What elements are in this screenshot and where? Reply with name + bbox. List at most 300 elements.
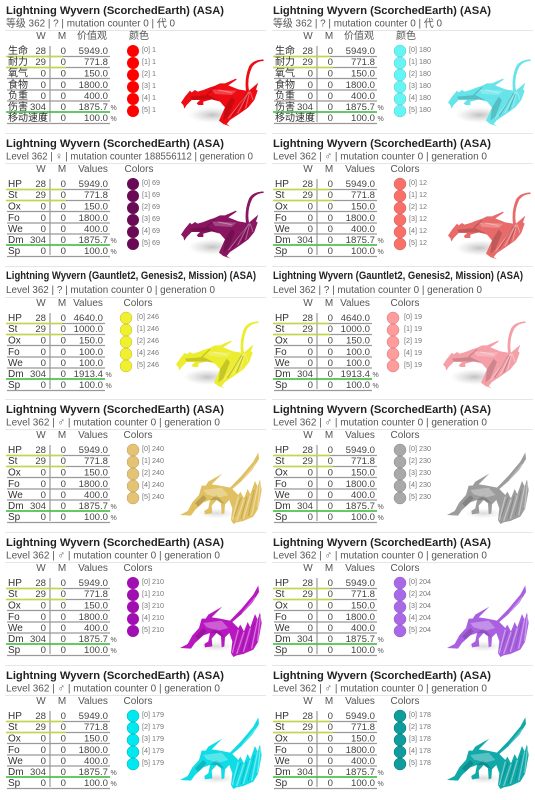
colours list xyxy=(124,696,164,770)
stats table: 29 xyxy=(35,589,46,600)
stats table: 氧气 xyxy=(275,66,295,80)
subtitle: Level 362 | ♂ | mutation counter 0 | generation 0 xyxy=(6,416,220,428)
stats table: 0 xyxy=(328,68,333,80)
stats table: Dm xyxy=(8,369,24,380)
stats table: 0 xyxy=(328,80,333,91)
stats table: 0 xyxy=(328,324,333,335)
stats table: 伤害 xyxy=(275,100,295,113)
subtitle: Level 362 | ♀ | mutation counter 188556112 | generation 0 xyxy=(6,150,253,162)
stats table: 28 xyxy=(302,711,313,722)
stats table: 304 xyxy=(30,767,47,778)
stats table: 150.0 xyxy=(346,336,370,346)
stats table: 0 xyxy=(328,623,333,634)
colours list: [0] 204 xyxy=(409,577,431,586)
stats table: 0 xyxy=(61,313,66,324)
stats table: 304 xyxy=(30,102,47,113)
stats table: 400.0 xyxy=(351,756,375,767)
colours list: [3] 1 xyxy=(142,81,156,90)
colours list: Colors xyxy=(124,298,152,309)
stats table: % xyxy=(110,116,117,123)
stats table: 0 xyxy=(61,578,66,589)
stats table: 0 xyxy=(328,113,333,124)
colours list: [4] 204 xyxy=(409,613,431,622)
stats table: Dm xyxy=(275,235,291,246)
stats table: 100.0 xyxy=(346,380,370,391)
stats table: 304 xyxy=(30,501,47,512)
stats table: 771.8 xyxy=(351,190,375,201)
stats table: 0 xyxy=(308,468,313,478)
colours list: [0] 210 xyxy=(142,577,164,586)
stats table: 400.0 xyxy=(351,490,375,501)
stats table: 0 xyxy=(328,445,333,456)
stats table: 304 xyxy=(297,767,314,778)
stats table: 0 xyxy=(308,479,313,490)
stats table: 0 xyxy=(308,224,313,235)
stats table: We xyxy=(275,623,290,634)
stats table: 28 xyxy=(302,578,313,589)
wyvern image xyxy=(447,717,529,789)
stats table: 0 xyxy=(61,380,66,391)
stats table: 1875.7 xyxy=(79,634,108,645)
stats table: 0 xyxy=(41,224,46,235)
stats table: 0 xyxy=(41,468,46,478)
stats table: 100.0 xyxy=(351,645,375,656)
stats table: 150.0 xyxy=(351,202,375,212)
stats table: 100.0 xyxy=(79,358,103,369)
title: Lightning Wyvern (Gauntlet2, Genesis2, Mission) (ASA) xyxy=(6,270,256,282)
stats table: 0 xyxy=(308,347,313,358)
colours list: [0] 12 xyxy=(409,178,427,187)
stats table: Sp xyxy=(8,246,21,257)
stats table: 28 xyxy=(35,313,46,324)
colours list: [2] 178 xyxy=(409,722,431,731)
colours list: [5] 246 xyxy=(137,360,159,369)
stats table: 0 xyxy=(328,224,333,235)
wyvern image xyxy=(447,452,529,524)
stats table: 5949.0 xyxy=(346,711,375,722)
stats table: 29 xyxy=(302,589,313,600)
stats table: 0 xyxy=(61,235,66,246)
stats table: % xyxy=(378,105,384,112)
stats table: 0 xyxy=(308,756,313,767)
stats table: HP xyxy=(275,179,289,190)
stats table: St xyxy=(275,589,285,600)
stats table: 0 xyxy=(61,778,66,789)
stats table: St xyxy=(275,324,285,335)
title: Lightning Wyvern (ScorchedEarth) (ASA) xyxy=(273,138,491,150)
stats table xyxy=(6,298,112,391)
stats table: 100.0 xyxy=(84,113,108,124)
colours list: [4] 1 xyxy=(142,93,156,102)
stats table: 304 xyxy=(297,102,314,113)
stats table: 生命 xyxy=(8,44,28,57)
stats table: % xyxy=(378,238,384,245)
stats table: 0 xyxy=(308,91,313,102)
stats table: 150.0 xyxy=(84,202,108,212)
stats table: 0 xyxy=(328,380,333,391)
stats table: HP xyxy=(8,179,22,190)
stats table: 0 xyxy=(328,501,333,512)
stats table: 5949.0 xyxy=(346,46,375,57)
stats table: W xyxy=(303,563,313,574)
stats table: 0 xyxy=(41,623,46,634)
stats table: 771.8 xyxy=(351,589,375,600)
stats table: 0 xyxy=(61,57,66,68)
wyvern image xyxy=(448,192,531,259)
stats table: 1875.7 xyxy=(79,102,108,113)
stats table: W xyxy=(36,563,46,574)
stats table: 0 xyxy=(328,179,333,190)
stats table: 771.8 xyxy=(351,57,375,68)
stats table: 5949.0 xyxy=(346,578,375,589)
stats table xyxy=(6,29,117,124)
stats table: St xyxy=(275,190,285,201)
stats table xyxy=(6,164,117,257)
colours list: [5] 204 xyxy=(409,625,431,634)
stats table: Sp xyxy=(8,645,21,656)
stats table: We xyxy=(8,224,23,235)
stats table: 0 xyxy=(41,347,46,358)
stats table: HP xyxy=(275,313,289,324)
stats table: 150.0 xyxy=(84,68,108,80)
stats table: 0 xyxy=(61,246,66,257)
stats table: 0 xyxy=(328,358,333,369)
colours list: [5] 69 xyxy=(142,238,160,247)
stats table: 0 xyxy=(308,612,313,623)
stats table xyxy=(273,696,384,789)
colours list: Colors xyxy=(391,563,419,574)
stats table: 0 xyxy=(61,113,66,124)
stats table: 0 xyxy=(328,190,333,201)
stats table: 0 xyxy=(41,213,46,224)
subtitle: Level 362 | ? | mutation counter 0 | generation 0 xyxy=(6,284,215,296)
colours list: [1] 12 xyxy=(409,190,427,199)
stats table: 29 xyxy=(302,722,313,733)
stats table: 0 xyxy=(61,102,66,113)
colours list: [2] 204 xyxy=(409,589,431,598)
stats table: 0 xyxy=(61,179,66,190)
stats table: 0 xyxy=(328,202,333,212)
stats table: We xyxy=(8,490,23,501)
stats table: Values xyxy=(340,298,370,309)
stats table: 100.0 xyxy=(346,358,370,369)
stats table: 100.0 xyxy=(351,246,375,257)
stats table: 0 xyxy=(41,246,46,257)
stats table: Sp xyxy=(275,645,288,656)
colours list xyxy=(391,164,427,250)
stats table: 0 xyxy=(328,745,333,756)
colours list: [2] 69 xyxy=(142,202,160,211)
colours list xyxy=(127,29,156,117)
stats table: 5949.0 xyxy=(346,445,375,456)
stats table: 0 xyxy=(308,600,313,612)
colours list: [4] 69 xyxy=(142,226,160,235)
stats table: 5949.0 xyxy=(79,445,108,456)
wyvern image xyxy=(180,585,262,657)
stats table: 0 xyxy=(61,445,66,456)
wyvern image xyxy=(180,717,262,789)
stats table: 400.0 xyxy=(84,756,108,767)
stats table: HP xyxy=(275,711,289,722)
colours list: [3] 210 xyxy=(142,601,164,610)
stats table: 耐力 xyxy=(275,55,295,68)
stats table: % xyxy=(110,648,117,655)
stats table: HP xyxy=(8,313,22,324)
stats table: 5949.0 xyxy=(79,711,108,722)
colours list: [3] 204 xyxy=(409,601,431,610)
stats table: 4640.0 xyxy=(341,313,370,324)
card: cyan wyvern (colour 180) xyxy=(272,5,533,126)
stats table: W xyxy=(36,31,46,42)
subtitle: 等级 362 | ? | mutation counter 0 | 代 0 xyxy=(273,16,442,30)
stats table xyxy=(273,298,379,391)
stats table: We xyxy=(275,756,290,767)
stats table: 5949.0 xyxy=(346,179,375,190)
colours list: [4] 178 xyxy=(409,746,431,755)
colours list: [3] 179 xyxy=(142,734,164,743)
stats table: 氧气 xyxy=(8,66,28,80)
stats table: 304 xyxy=(297,501,314,512)
subtitle: Level 362 | ♂ | mutation counter 0 | generation 0 xyxy=(6,682,220,694)
stats table: HP xyxy=(8,711,22,722)
title: Lightning Wyvern (ScorchedEarth) (ASA) xyxy=(6,404,224,416)
colours list: [1] 246 xyxy=(137,324,159,333)
stats table: Values xyxy=(73,298,103,309)
stats table: Ox xyxy=(8,336,21,346)
colours list: [5] 178 xyxy=(409,758,431,767)
stats table: 29 xyxy=(302,190,313,201)
colours list: [3] 69 xyxy=(142,214,160,223)
stats table: Values xyxy=(78,563,108,574)
stats table: 食物 xyxy=(8,78,28,91)
stats table: 0 xyxy=(41,645,46,656)
subtitle: Level 362 | ♂ | mutation counter 0 | generation 0 xyxy=(6,550,220,562)
stats table: % xyxy=(110,105,117,112)
stats table: % xyxy=(378,637,384,644)
colours list xyxy=(124,430,164,504)
stats table: 28 xyxy=(35,711,46,722)
stats table xyxy=(273,430,384,523)
stats table: Ox xyxy=(8,468,21,478)
stats table: 0 xyxy=(328,235,333,246)
wyvern image xyxy=(181,191,264,258)
stats table: 150.0 xyxy=(351,600,375,612)
colours list: [3] 12 xyxy=(409,214,427,223)
stats table: 1875.7 xyxy=(346,102,375,113)
stats table: 0 xyxy=(61,490,66,501)
stats table: 28 xyxy=(302,179,313,190)
card: pink wyvern (colour 19) xyxy=(272,266,533,391)
stats table: Ox xyxy=(8,600,21,612)
stats table: Ox xyxy=(275,600,288,612)
colours list: [0] 69 xyxy=(142,178,160,187)
stats table: 29 xyxy=(302,324,313,335)
stats table: St xyxy=(8,722,18,733)
colours list: [2] 12 xyxy=(409,202,427,211)
stats table: 0 xyxy=(61,756,66,767)
stats table: 1875.7 xyxy=(346,767,375,778)
wyvern image xyxy=(180,452,262,524)
stats table: Sp xyxy=(275,246,288,257)
stats table: 771.8 xyxy=(84,57,108,68)
title: Lightning Wyvern (ScorchedEarth) (ASA) xyxy=(6,537,224,549)
stats table: Sp xyxy=(275,778,288,789)
stats table: 1800.0 xyxy=(346,479,375,490)
card: yellow wyvern (colour 246) xyxy=(5,266,266,391)
stats table: 771.8 xyxy=(84,589,108,600)
stats table: 1800.0 xyxy=(346,612,375,623)
stats table: 0 xyxy=(61,468,66,478)
stats table: We xyxy=(275,490,290,501)
stats table: 1875.7 xyxy=(79,235,108,246)
stats table: 0 xyxy=(308,358,313,369)
stats table: 304 xyxy=(297,235,314,246)
stats table: % xyxy=(110,515,117,522)
stats table: 100.0 xyxy=(84,512,108,523)
stats table: % xyxy=(378,648,384,655)
colours list: [3] 230 xyxy=(409,468,431,477)
wyvern image xyxy=(443,321,526,388)
stats table: 0 xyxy=(61,46,66,57)
colours list: [0] 19 xyxy=(404,312,422,321)
stats table: Fo xyxy=(275,347,287,358)
colours list: [0] 179 xyxy=(142,710,164,719)
stats table: Dm xyxy=(275,767,291,778)
stats table: 0 xyxy=(61,369,66,380)
stats table: 150.0 xyxy=(84,468,108,478)
stats table: 29 xyxy=(35,190,46,201)
stats table: 0 xyxy=(61,324,66,335)
colours list: Colors xyxy=(391,298,419,309)
stats table: 1800.0 xyxy=(346,745,375,756)
stats table: % xyxy=(110,249,117,256)
stats table: 0 xyxy=(41,600,46,612)
stats table: 生命 xyxy=(275,44,295,57)
card: gold wyvern (colour 240) xyxy=(5,400,266,524)
stats table: Fo xyxy=(275,213,287,224)
colours list: [2] 179 xyxy=(142,722,164,731)
colours list xyxy=(391,563,431,637)
stats table: 0 xyxy=(328,91,333,102)
stats table: % xyxy=(378,116,384,123)
stats table: 29 xyxy=(35,324,46,335)
colours list: [4] 210 xyxy=(142,613,164,622)
stats table: W xyxy=(303,298,313,309)
stats table: 0 xyxy=(61,612,66,623)
stats table: 0 xyxy=(61,711,66,722)
colours list: [3] 180 xyxy=(409,81,431,90)
stats table: 400.0 xyxy=(351,91,375,102)
stats table: Ox xyxy=(8,734,21,744)
stats table: 1800.0 xyxy=(346,80,375,91)
colours list: [2] 1 xyxy=(142,69,156,78)
stats table: 0 xyxy=(41,202,46,212)
stats table xyxy=(6,430,117,523)
colours list: [0] 240 xyxy=(142,444,164,453)
stats table: 0 xyxy=(61,456,66,467)
stats table: 0 xyxy=(328,468,333,478)
stats table: We xyxy=(275,224,290,235)
stats table: Sp xyxy=(8,512,21,523)
colours list: [1] 69 xyxy=(142,190,160,199)
subtitle: 等级 362 | ? | mutation counter 0 | 代 0 xyxy=(6,16,175,30)
stats table: 0 xyxy=(41,358,46,369)
stats table: 29 xyxy=(302,57,313,68)
subtitle: Level 362 | ? | mutation counter 0 | generation 0 xyxy=(273,284,482,296)
stats table: 0 xyxy=(308,645,313,656)
stats table: 0 xyxy=(328,612,333,623)
colours list: [4] 179 xyxy=(142,746,164,755)
stats table: Dm xyxy=(275,634,291,645)
stats table: 伤害 xyxy=(8,100,28,113)
stats table: 0 xyxy=(328,600,333,612)
stats table: 0 xyxy=(61,202,66,212)
stats table: % xyxy=(110,504,117,511)
colours list: [0] 246 xyxy=(137,312,159,321)
title: Lightning Wyvern (ScorchedEarth) (ASA) xyxy=(273,5,491,17)
stats table: 771.8 xyxy=(351,722,375,733)
colours list: [0] 180 xyxy=(409,45,431,54)
stats table: 0 xyxy=(328,722,333,733)
stats table: 150.0 xyxy=(84,734,108,744)
stats table: 304 xyxy=(297,634,314,645)
stats table: 0 xyxy=(61,68,66,80)
stats table: 0 xyxy=(328,347,333,358)
stats table: 0 xyxy=(308,336,313,346)
colours list: [5] 179 xyxy=(142,758,164,767)
stats table: 5949.0 xyxy=(79,46,108,57)
stats table: 1800.0 xyxy=(79,213,108,224)
stats table: 0 xyxy=(328,734,333,744)
colours list: [5] 240 xyxy=(142,492,164,501)
stats table: 771.8 xyxy=(84,190,108,201)
stats table: 28 xyxy=(35,179,46,190)
colours list: [1] 210 xyxy=(142,589,164,598)
stats table: Ox xyxy=(275,734,288,744)
stats table: 0 xyxy=(61,722,66,733)
stats table: 1800.0 xyxy=(79,479,108,490)
stats table: % xyxy=(378,249,384,256)
stats table: 150.0 xyxy=(351,734,375,744)
colours list xyxy=(125,164,160,250)
colours list xyxy=(391,430,431,504)
stats table: % xyxy=(372,372,379,379)
stats table: We xyxy=(8,358,23,369)
stats table: 28 xyxy=(302,46,313,57)
stats table: 100.0 xyxy=(84,778,108,789)
stats table: 0 xyxy=(41,380,46,391)
stats table: 负重 xyxy=(8,89,28,102)
stats table: 0 xyxy=(41,479,46,490)
stats table: 400.0 xyxy=(84,623,108,634)
stats table: W xyxy=(36,696,46,707)
stats table: 0 xyxy=(328,490,333,501)
colours list: [1] 240 xyxy=(142,456,164,465)
colours list: [4] 180 xyxy=(409,93,431,102)
stats table: Values xyxy=(345,696,375,707)
stats table: Ox xyxy=(8,202,21,212)
card: magenta wyvern (colour 210) xyxy=(5,532,266,657)
stats table: 0 xyxy=(61,347,66,358)
stats table: 28 xyxy=(302,445,313,456)
stats table: St xyxy=(8,324,18,335)
stats table: % xyxy=(110,238,117,245)
colours list: [4] 240 xyxy=(142,480,164,489)
stats table: 0 xyxy=(308,512,313,523)
stats table: Dm xyxy=(275,501,291,512)
colours list: [4] 19 xyxy=(404,348,422,357)
stats table: We xyxy=(8,756,23,767)
